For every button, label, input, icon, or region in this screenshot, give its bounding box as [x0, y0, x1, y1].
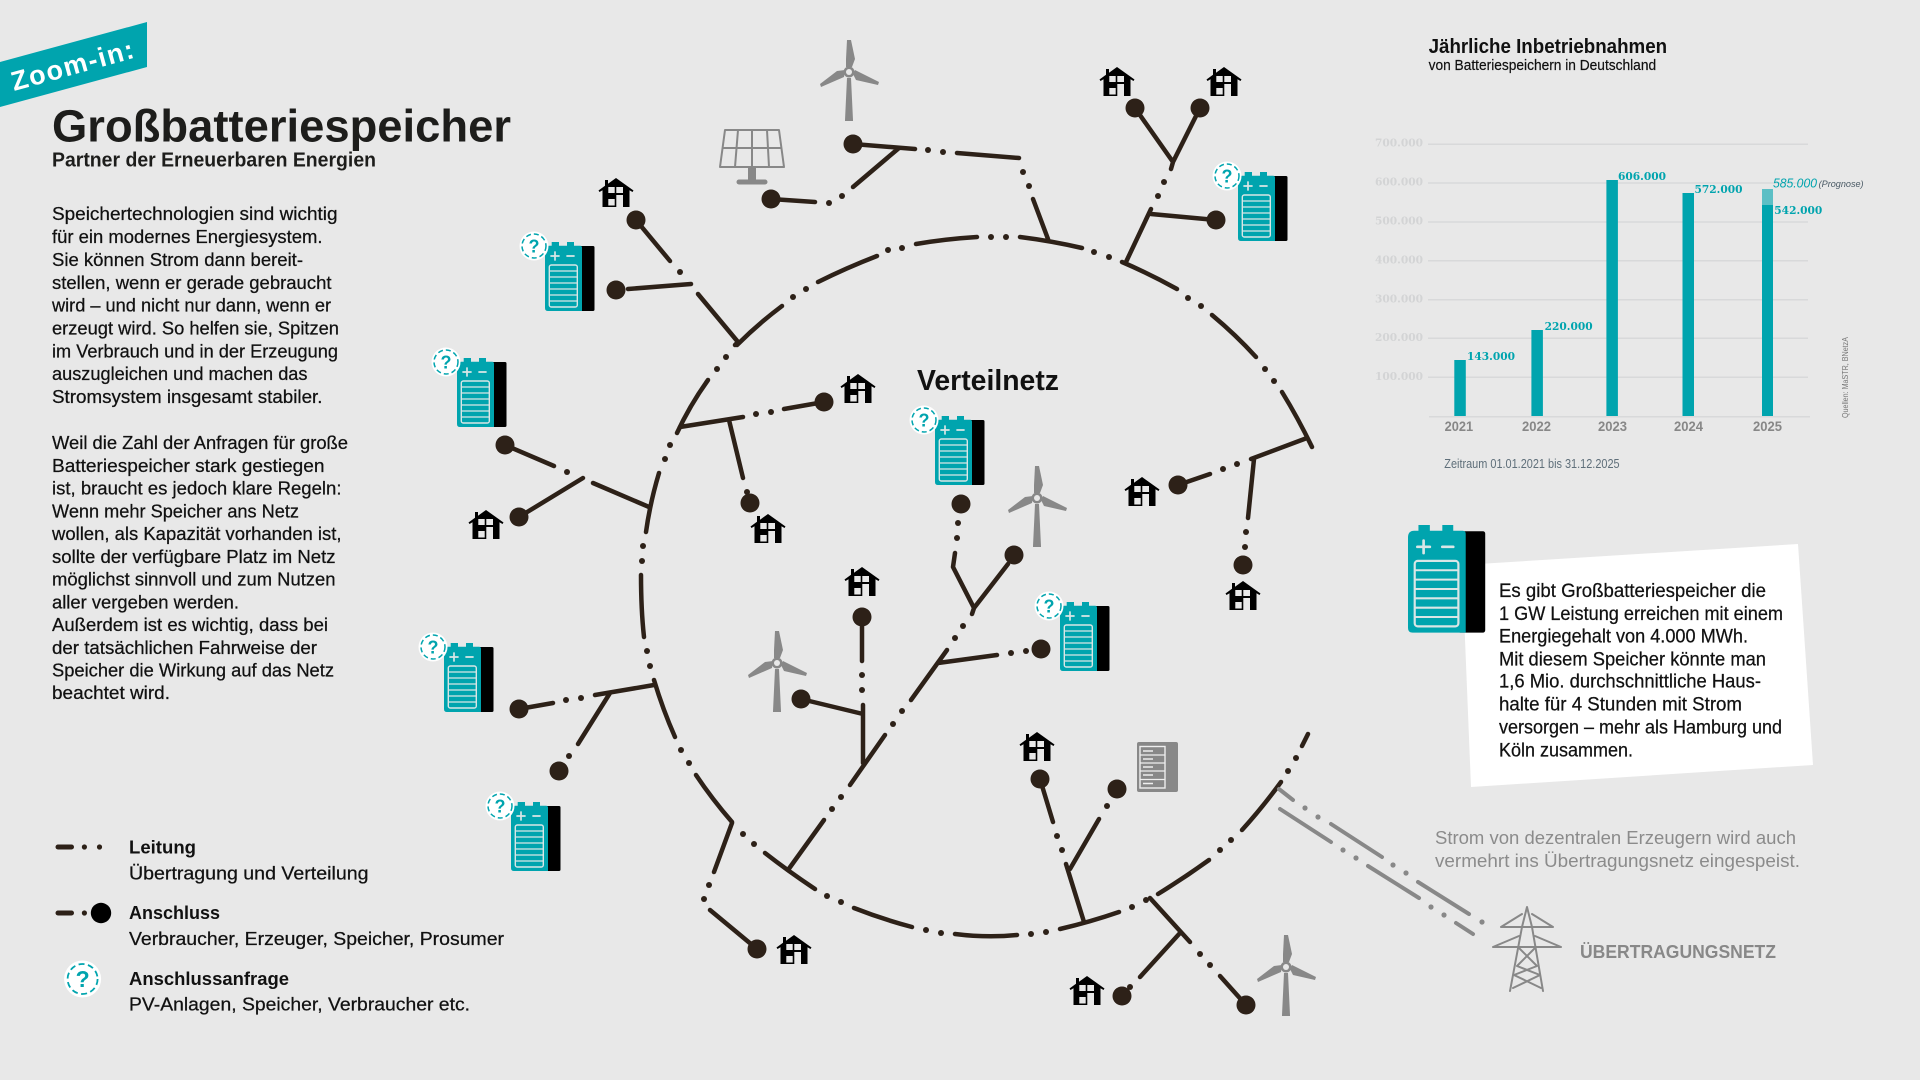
battery request 7: ? [1222, 166, 1232, 186]
battery request 1: ? [528, 236, 540, 256]
subtitle: Partner der Erneuerbaren Energien [52, 150, 376, 172]
value labels: 542.000 [1774, 203, 1822, 217]
period note: Zeitraum 01.01.2021 bis 31.12.2025 [1444, 456, 1620, 471]
battery request 5: ? [918, 410, 930, 430]
legend: Leitung: Übertragung und Verteilung [129, 862, 368, 884]
transmission lines (grey) [1279, 789, 1485, 934]
value labels: 606.000 [1618, 169, 1666, 183]
branches: left [496, 210, 834, 958]
callout text: Es gibt Großbatteriespeicher die [1499, 581, 1766, 602]
title: Großbatteriespeicher [52, 100, 511, 152]
text block: intro paragraphs: sollte der verfügbare Platz im Netz [52, 546, 336, 567]
legend: Anschlussanfrage: ? [76, 966, 90, 992]
text block: intro paragraphs: möglichst sinnvoll und zum Nutzen [52, 568, 336, 590]
x-axis labels: 2025 [1753, 419, 1782, 434]
distribution ring [639, 234, 1312, 937]
x-axis labels: 2023 [1598, 419, 1627, 434]
callout text: versorgen – mehr als Hamburg und [1499, 718, 1782, 739]
callout text: halte für 4 Stunden mit Strom [1499, 695, 1742, 716]
legend [58, 836, 504, 1015]
chart gridlines [1428, 144, 1810, 417]
branches: centre tree [788, 494, 1050, 870]
bars [1454, 180, 1773, 416]
callout text: 1 GW Leistung erreichen mit einem [1499, 604, 1783, 625]
callout panel [1462, 544, 1813, 787]
legend: Anschluss [58, 902, 504, 949]
value labels: (Prognose) [1819, 179, 1864, 189]
icon: server / storage rack [1137, 742, 1178, 792]
value labels: 220.000 [1545, 319, 1593, 333]
text block: intro paragraphs: wollen, als Kapazität vorhanden ist, [51, 523, 342, 544]
battery request 6 [1034, 592, 1110, 671]
text block: intro paragraphs: Batteriespeicher stark gestiegen [52, 455, 324, 476]
note: grey text on decentral feed-in: vermehrt ins Übertragungsnetz eingespeist. [1435, 850, 1800, 871]
note: grey text on decentral feed-in [1435, 827, 1800, 871]
battery request 2 [432, 348, 506, 427]
text block: intro paragraphs [51, 203, 348, 703]
battery request 5 [910, 406, 984, 485]
callout text: Köln zusammen. [1499, 741, 1633, 762]
icon: solar panel [720, 130, 784, 182]
icons: storage requests (batteries with question mark) [418, 162, 1288, 871]
source note: Quellen: MaSTR, BNetzA [1840, 337, 1850, 418]
battery request 7 [1212, 162, 1288, 241]
battery request 2: ? [440, 352, 452, 372]
network diagram [496, 98, 1485, 1014]
legend: Leitung [58, 836, 368, 884]
x-axis labels [1445, 419, 1782, 434]
icon: transmission tower [1493, 907, 1561, 991]
callout: capacity facts [1408, 525, 1813, 787]
value labels: 143.000 [1467, 349, 1515, 363]
text block: intro paragraphs: Stromsystem insgesamt stabiler. [52, 386, 322, 407]
note: grey text on decentral feed-in: Strom von dezentralen Erzeugern wird auch [1435, 827, 1796, 848]
legend: Anschlussanfrage: Anschlussanfrage [129, 968, 289, 989]
value labels [1467, 169, 1864, 363]
banner: Zoom-in [0, 22, 147, 107]
icons: houses [468, 67, 1260, 1005]
icon: large battery [1408, 525, 1485, 633]
battery request 4: ? [494, 796, 506, 816]
text block: intro paragraphs: wird – und nicht nur dann, wenn er [51, 294, 331, 316]
battery request 6: ? [1044, 596, 1054, 616]
text block: intro paragraphs: für ein modernes Energiesystem. [52, 226, 322, 247]
value labels: 585.000 [1773, 176, 1818, 190]
legend: Leitung: Leitung [129, 836, 196, 858]
battery request 1 [520, 232, 594, 311]
text block: intro paragraphs: beachtet wird. [52, 682, 170, 703]
callout text: 1,6 Mio. durchschnittliche Haus- [1499, 672, 1761, 693]
y-axis labels: 300.000 [1375, 292, 1423, 306]
y-axis labels: 600.000 [1375, 176, 1423, 188]
y-axis labels: 700.000 [1375, 136, 1423, 150]
text block: intro paragraphs: Außerdem ist es wichtig, dass bei [52, 614, 328, 635]
battery request 4 [486, 792, 560, 871]
text block: intro paragraphs: ist, braucht es jedoch klare Regeln: [52, 478, 342, 498]
legend: Anschluss: Verbraucher, Erzeuger, Speicher, Prosumer [129, 928, 504, 949]
legend: Anschlussanfrage [64, 960, 470, 1015]
legend: Anschlussanfrage: PV-Anlagen, Speicher, Verbraucher etc. [129, 994, 470, 1015]
callout text: Energiegehalt von 4.000 MWh. [1499, 627, 1748, 648]
value labels: 572.000 [1694, 182, 1742, 196]
chart subtitle: von Batteriespeichern in Deutschland [1429, 58, 1656, 74]
banner: Zoom-in: Zoom-in: [8, 34, 137, 97]
branches: right and bottom [1030, 438, 1307, 1014]
icons: wind turbines [748, 40, 1316, 1016]
text block: intro paragraphs: Speicher die Wirkung auf das Netz [52, 660, 334, 680]
text block: intro paragraphs: auszugleichen und machen das [52, 363, 308, 384]
chart title: Jährliche Inbetriebnahmen [1429, 36, 1667, 58]
text block: intro paragraphs: der tatsächlichen Fahrweise der [52, 637, 317, 658]
text block: intro paragraphs: Wenn mehr Speicher ans Netz [52, 500, 299, 521]
y-axis labels [1375, 136, 1423, 383]
battery request 3 [418, 632, 494, 712]
label: Verteilnetz: Verteilnetz [917, 365, 1059, 397]
text block: intro paragraphs: erzeugt wird. So helfen sie, Spitzen [52, 318, 339, 338]
text block: intro paragraphs: Sie können Strom dann bereit- [52, 249, 303, 270]
y-axis labels: 100.000 [1375, 370, 1423, 383]
callout text [1499, 581, 1783, 762]
y-axis labels: 200.000 [1375, 331, 1423, 344]
y-axis labels: 500.000 [1375, 214, 1423, 228]
label: Übertragungsnetz: ÜBERTRAGUNGSNETZ [1580, 942, 1776, 962]
x-axis labels: 2024 [1674, 419, 1703, 434]
text block: intro paragraphs: aller vergeben werden. [52, 591, 239, 612]
battery request 3: ? [428, 638, 438, 658]
legend: Anschluss: Anschluss [129, 902, 220, 923]
text block: intro paragraphs: Weil die Zahl der Anfragen für große [52, 432, 348, 453]
text block: intro paragraphs: im Verbrauch und in der Erzeugung [52, 340, 338, 362]
branches: top [762, 98, 1226, 262]
bar chart: Jährliche Inbetriebnahmen [1375, 36, 1864, 471]
text block: intro paragraphs: stellen, wenn er gerade gebraucht [52, 272, 332, 293]
x-axis labels: 2021 [1445, 419, 1474, 434]
x-axis labels: 2022 [1522, 419, 1551, 434]
text block: intro paragraphs: Speichertechnologien sind wichtig [52, 203, 338, 224]
y-axis labels: 400.000 [1375, 254, 1423, 266]
callout text: Mit diesem Speicher könnte man [1499, 650, 1766, 671]
